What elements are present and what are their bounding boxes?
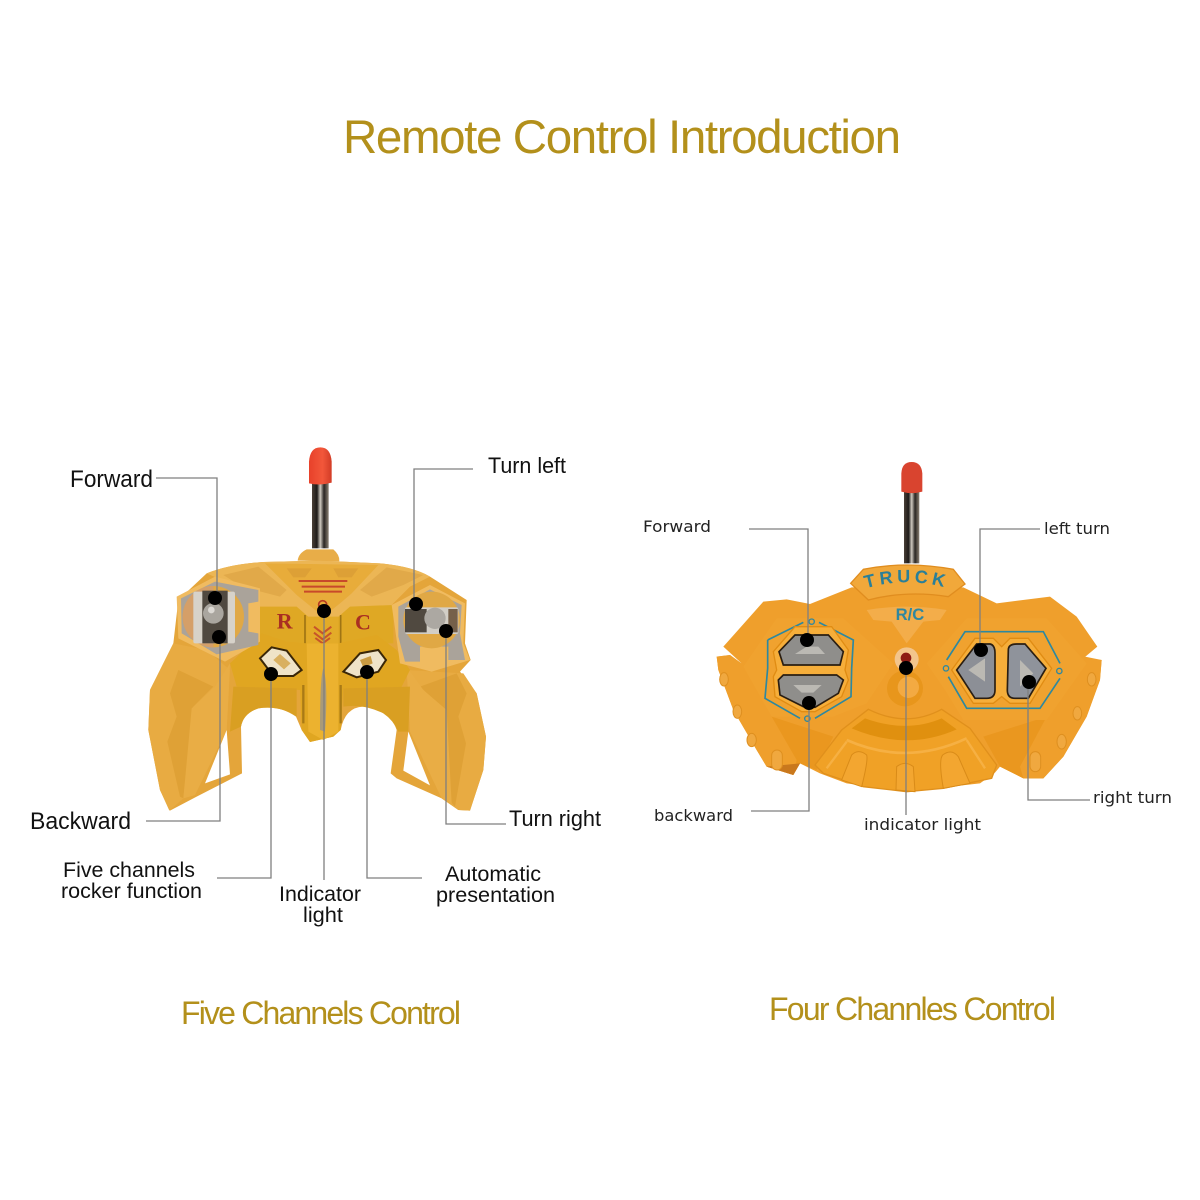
five channels callout dots: [208, 591, 453, 681]
four channels callout lines: [749, 529, 1090, 815]
wings: [148, 643, 486, 811]
five channels caption: Five Channels Control: [181, 995, 461, 1031]
five channels labels: Indicator: [279, 883, 361, 906]
four channels caption: Four Channles Control: [769, 991, 1056, 1027]
grip openings: [205, 730, 430, 785]
five channels labels: rocker function: [61, 880, 202, 903]
controller body: [717, 587, 1102, 792]
right button pad: [927, 618, 1087, 720]
five channels labels: Automatic: [445, 863, 541, 886]
five channels callout lines: [146, 469, 506, 880]
truck badge: TRUCK: [863, 570, 946, 588]
four channels callout dots: [800, 633, 1036, 710]
antenna: [901, 462, 922, 563]
four channels controller illustration: [716, 462, 1102, 792]
five channels labels: Turn right: [509, 806, 601, 831]
five channels labels: Five channels: [63, 859, 195, 882]
R/C badge: R/C: [896, 605, 924, 624]
indicator LED and button: [887, 647, 923, 706]
centre panel with R C: R: [277, 609, 294, 634]
right stick: [392, 585, 470, 672]
centre panel with R C: [258, 601, 393, 650]
presentation button: [343, 650, 386, 677]
side grips: [717, 655, 1102, 778]
five channels labels: Turn left: [488, 453, 566, 478]
truck badge: [850, 564, 966, 600]
five channels controller illustration: [148, 447, 486, 811]
antenna: [298, 447, 339, 561]
controller body: [148, 561, 486, 811]
five channels labels: light: [303, 904, 343, 927]
four channels labels: backward: [654, 806, 733, 825]
left stick: [177, 577, 260, 662]
left button pad: [743, 618, 893, 721]
centre panel with R C: C: [355, 609, 371, 634]
five channels labels: [30, 453, 601, 927]
R/C badge: [867, 605, 947, 643]
title: Remote Control Introduction: [343, 111, 901, 164]
top shell: [207, 561, 430, 643]
five channels labels: presentation: [436, 884, 555, 907]
five channels labels: Forward: [70, 466, 153, 493]
five channels labels: Backward: [30, 808, 131, 835]
four channels labels: right turn: [1093, 788, 1172, 807]
lower face: [230, 633, 410, 742]
four channels labels: indicator light: [864, 815, 981, 834]
bottom fan: [815, 709, 997, 792]
four channels labels: Forward: [643, 517, 711, 536]
rocker button: [260, 647, 302, 676]
four channels labels: [643, 517, 1172, 834]
four channels labels: left turn: [1044, 519, 1110, 538]
